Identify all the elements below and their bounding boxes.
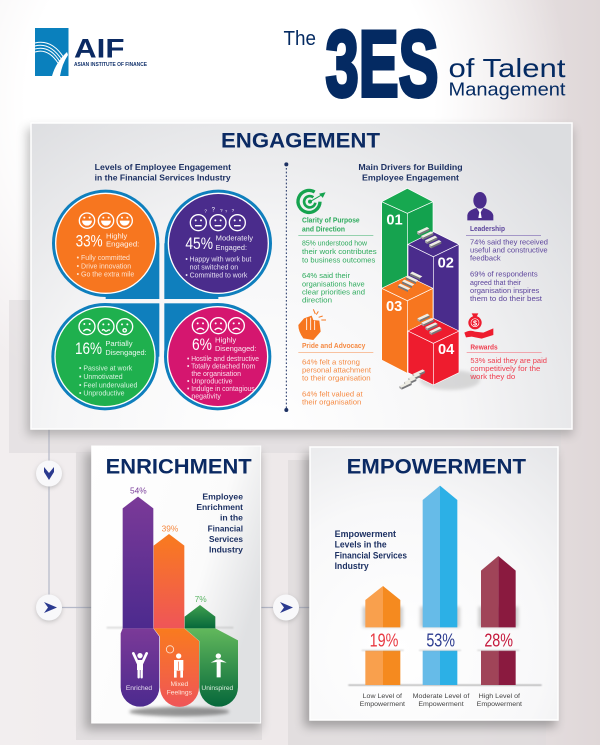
circle: 45% moderately engaged: ? — [204, 209, 207, 214]
dotted divider — [284, 162, 288, 412]
block 01: 01 — [386, 213, 403, 229]
subheading: empowerment levels: Industry — [335, 561, 369, 571]
icon: money bag in hand — [464, 313, 493, 339]
subheading: employee enrichment: Financial — [208, 523, 243, 533]
subheading: levels of employee engagement: in the Financial Services Industry — [95, 173, 231, 183]
subheading: employee enrichment: Services — [209, 534, 243, 544]
bar: low level 19%: 19% — [370, 630, 398, 651]
logo: Asian Institute of Finance: ASIAN INSTITUTE OF FINANCE — [74, 62, 148, 68]
driver 3 text: pride and advocacy: 64% felt valued at — [302, 389, 363, 398]
bar: enriched 54%: 54% — [130, 485, 147, 495]
title: The 3Es of Talent Management: The — [284, 28, 316, 50]
bar: low level 19%: Low Level of — [363, 693, 402, 700]
circle: 33% highly engaged: Highly — [106, 232, 127, 241]
title: The 3Es of Talent Management — [284, 11, 566, 116]
arrow button: right — [36, 594, 62, 622]
subheading: empowerment levels — [335, 529, 407, 571]
block 03 — [382, 276, 433, 373]
block 04 — [408, 318, 459, 385]
driver 4 text: rewards — [467, 345, 547, 381]
circle: 33% highly engaged — [52, 190, 159, 299]
driver 1 text: clarity of purpose: and Direction — [302, 226, 345, 233]
driver 1 text: clarity of purpose — [298, 218, 377, 305]
bar: mixed feelings 39%: Mixed — [170, 681, 189, 688]
panel: enrichment — [85, 446, 261, 730]
circle: 45% moderately engaged — [164, 190, 272, 299]
bar: uninspired 7% — [185, 594, 238, 707]
arrow button: down — [36, 460, 62, 488]
icon: money bag in hand: $ — [473, 318, 477, 327]
driver 1 text: clarity of purpose: to business outcomes — [302, 255, 376, 264]
circle: 16% partially disengaged — [51, 303, 159, 410]
circle: 45% moderately engaged: ? — [225, 209, 228, 214]
heading: enrichment: ENRICHMENT — [106, 454, 252, 478]
circle: 6% highly disengaged: • Hostile and destructive — [187, 356, 259, 363]
panel: engagement — [27, 123, 573, 435]
driver 3 text: pride and advocacy: 64% felt a strong — [302, 357, 360, 366]
bar: enriched 54% — [121, 485, 184, 707]
subheading: employee enrichment: in the — [220, 513, 243, 523]
driver 4 text: rewards: competitively for the — [470, 364, 540, 373]
bar: low level 19%: Empowerment — [360, 701, 405, 708]
driver 1 text: clarity of purpose: Clarity of Purpose — [302, 218, 360, 225]
bar: low level 19% — [360, 586, 405, 708]
circle: 16% partially disengaged: 16% — [75, 339, 102, 358]
heading: engagement: ENGAGEMENT — [221, 128, 380, 152]
circle: 6% highly disengaged: 6% — [192, 335, 212, 354]
icon: leader — [467, 192, 493, 220]
circle: 6% highly disengaged: Highly — [215, 335, 236, 344]
block 02: 02 — [438, 256, 454, 272]
engagement levels section — [51, 162, 272, 410]
circle: 45% moderately engaged: ? — [212, 207, 216, 213]
driver 2 text: leadership: 74% said they received — [470, 237, 548, 246]
driver 2 text: leadership: useful and constructive — [470, 246, 548, 255]
driver 2 text: leadership — [466, 226, 548, 303]
driver 3 text: pride and advocacy — [298, 343, 373, 407]
circle: 16% partially disengaged: • Feel undervalued — [79, 382, 137, 389]
bar: mixed feelings 39% — [154, 523, 199, 707]
icon: target — [298, 190, 325, 212]
circle: 45% moderately engaged: ? — [232, 208, 235, 213]
circle: 6% highly disengaged: negativity — [191, 393, 221, 400]
circle: 16% partially disengaged: • Passive at work — [79, 366, 133, 373]
driver 2 text: leadership: agreed that their — [470, 278, 522, 287]
driver 1 text: clarity of purpose: organisations have — [302, 279, 365, 288]
circle: 45% moderately engaged: • Committed to work — [185, 273, 248, 280]
isometric staircase blocks — [382, 188, 480, 390]
block 01 — [382, 188, 433, 301]
bar: uninspired 7%: Uninspired — [201, 685, 234, 692]
subheading: empowerment levels: Empowerment — [335, 529, 396, 539]
subheading: employee enrichment: Employee — [202, 491, 243, 501]
title: The 3Es of Talent Management: of Talent — [448, 53, 566, 83]
driver 3 text: pride and advocacy: their organisation — [302, 398, 361, 407]
title: The 3Es of Talent Management: 3ES — [326, 11, 438, 116]
icon: clapping hands — [298, 309, 326, 340]
bar: mixed feelings 39%: Feelings — [167, 690, 193, 697]
driver 3 text: pride and advocacy: to their organisation — [302, 374, 371, 383]
driver 4 text: rewards: 53% said they are paid — [470, 356, 547, 365]
block 04: 04 — [438, 342, 455, 358]
circle: 33% highly engaged: 33% — [76, 232, 103, 251]
subheading: employee enrichment — [196, 491, 243, 555]
circle: 45% moderately engaged: Moderately — [216, 234, 253, 243]
circle: 45% moderately engaged: 45% — [185, 234, 213, 253]
circle: 16% partially disengaged: • Unmotivated — [79, 374, 123, 381]
stairs — [398, 227, 442, 390]
bar: enriched 54%: Enriched — [126, 685, 152, 692]
driver 4 text: rewards: work they do — [469, 372, 515, 381]
bar: high level 28%: Empowerment — [477, 701, 522, 708]
driver 1 text: clarity of purpose: clear priorities and — [302, 287, 365, 296]
driver 1 text: clarity of purpose: direction — [302, 296, 332, 305]
driver 4 text: rewards: Rewards — [470, 345, 498, 352]
circle: 45% moderately engaged: ? — [220, 208, 223, 213]
subheading: employee enrichment: Industry — [209, 545, 243, 555]
subheading: empowerment levels: Levels in the — [335, 540, 387, 550]
subheading: levels of employee engagement: Levels of Employee Engagement — [95, 162, 231, 172]
logo: Asian Institute of Finance: AIF — [74, 33, 124, 63]
driver 2 text: leadership: them to do their best — [470, 294, 542, 303]
circle: 6% highly disengaged: • Unproductive — [187, 378, 233, 385]
bar: uninspired 7%: 7% — [195, 594, 207, 604]
connector lines between panels — [49, 425, 310, 608]
circle: 6% highly disengaged — [164, 303, 271, 410]
driver 3 text: pride and advocacy: personal attachment — [302, 365, 371, 374]
circle: 33% highly engaged: • Fully committed — [77, 255, 130, 262]
block 03: 03 — [386, 299, 402, 315]
circle: 45% moderately engaged: not switched on — [190, 264, 238, 271]
circle: 45% moderately engaged: • Happy with work but — [185, 256, 251, 263]
block 02 — [408, 232, 459, 343]
circle: 6% highly disengaged: • Indulge in contagious — [187, 386, 255, 393]
circle: 33% highly engaged: • Go the extra mile — [77, 272, 134, 279]
bar: high level 28%: High Level of — [479, 693, 520, 700]
logo: Asian Institute of Finance — [35, 28, 148, 76]
driver 1 text: clarity of purpose: 85% understood how — [302, 239, 368, 248]
ground shadow — [107, 627, 233, 716]
circle: 16% partially disengaged: • Unproductive — [79, 390, 125, 397]
bar: mixed feelings 39%: 39% — [162, 523, 179, 533]
bar: moderate level 53%: 53% — [426, 630, 455, 651]
drivers section — [284, 162, 548, 412]
subheading: main drivers: Employee Engagement — [362, 173, 459, 183]
circle: 33% highly engaged: • Drive innovation — [77, 263, 131, 270]
circle: 45% moderately engaged: Engaged: — [216, 243, 247, 252]
bar: moderate level 53%: Moderate Level of — [413, 693, 469, 700]
subheading: main drivers: Main Drivers for Building — [358, 162, 463, 172]
circle: 6% highly disengaged: • Totally detached from — [187, 364, 255, 371]
subheading: empowerment levels: Financial Services — [335, 550, 407, 560]
title: The 3Es of Talent Management: Management — [448, 78, 566, 100]
subheading: levels of employee engagement — [95, 162, 231, 183]
driver 2 text: leadership: feedback — [470, 254, 501, 263]
bar: moderate level 53%: Empowerment — [418, 701, 464, 708]
circle: 16% partially disengaged: Partially — [105, 339, 133, 348]
driver 1 text: clarity of purpose: their work contributes — [302, 247, 377, 256]
driver 1 text: clarity of purpose: 64% said their — [302, 271, 351, 280]
circle: 6% highly disengaged: Disengaged: — [215, 344, 256, 353]
circle: 16% partially disengaged: Disengaged: — [105, 348, 147, 357]
driver 2 text: leadership: organisation inspires — [470, 286, 540, 295]
ground shadow — [348, 684, 542, 686]
circle: 6% highly disengaged: the organisation — [191, 371, 241, 378]
driver 3 text: pride and advocacy: Pride and Advocacy — [302, 343, 365, 350]
driver 2 text: leadership: 69% of respondents — [470, 270, 538, 279]
driver 2 text: leadership: Leadership — [470, 226, 505, 233]
heading: empowerment: EMPOWERMENT — [347, 454, 526, 478]
circle: 33% highly engaged: Engaged: — [106, 240, 139, 249]
bar: high level 28%: 28% — [484, 630, 513, 651]
bar: high level 28% — [477, 556, 522, 708]
arrow button: right to empowerment — [273, 594, 299, 622]
panel: empowerment — [304, 447, 558, 727]
subheading: employee enrichment: Enrichment — [196, 502, 243, 512]
subheading: main drivers — [358, 162, 463, 183]
bar: moderate level 53% — [413, 486, 469, 708]
